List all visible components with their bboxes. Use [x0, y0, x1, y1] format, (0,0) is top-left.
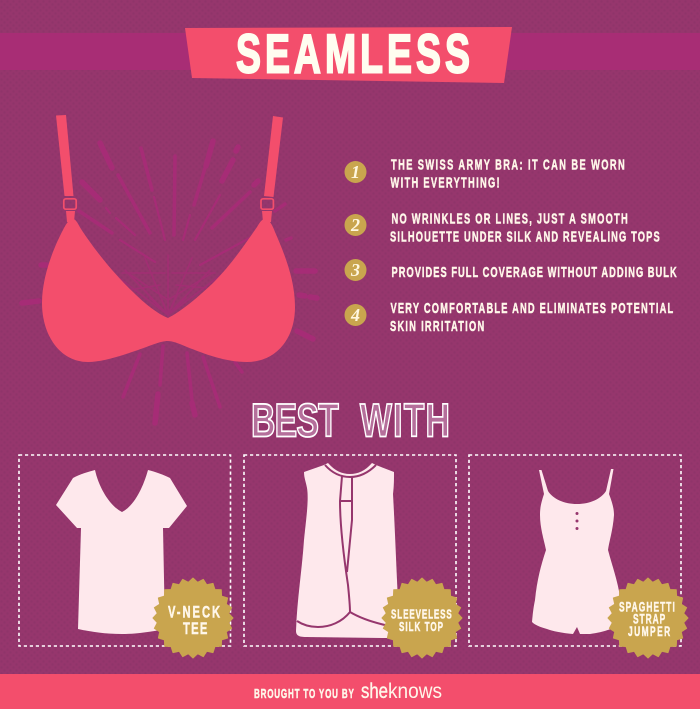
header ribbon band	[0, 33, 700, 70]
benefit 1	[344, 156, 625, 191]
badge: v-neck tee: TEE	[183, 620, 208, 639]
badge: sleeveless silk top	[382, 578, 462, 658]
footer	[0, 674, 700, 709]
benefit 4	[344, 300, 673, 335]
badge: v-neck tee	[153, 578, 233, 658]
footer credit: BROUGHT TO YOU BY	[254, 687, 354, 702]
burst rays behind bra	[22, 141, 317, 423]
icon: seamless bra	[42, 115, 295, 362]
heading: best with	[251, 394, 450, 447]
benefit 1: 1	[351, 162, 360, 182]
benefit 2: 2	[350, 215, 360, 235]
benefit 3: PROVIDES FULL COVERAGE WITHOUT ADDING BULK	[392, 264, 677, 281]
badge: spaghetti strap jumper: SPAGHETTI	[619, 601, 675, 615]
logo: sheknows: she	[361, 680, 388, 703]
title banner	[185, 22, 512, 84]
benefit 4: 4	[350, 305, 360, 325]
badge: spaghetti strap jumper	[608, 578, 688, 658]
title: SEAMLESS	[236, 22, 470, 84]
icon: v-neck tee	[56, 470, 187, 634]
badge: v-neck tee: V-NECK	[168, 603, 221, 622]
benefits list	[344, 156, 677, 335]
heading: best with: WITH	[360, 394, 450, 447]
logo: sheknows	[361, 680, 442, 703]
icon: spaghetti strap jumper	[532, 469, 622, 634]
logo: sheknows: knows	[388, 680, 442, 703]
panel: spaghetti strap jumper	[469, 455, 688, 658]
heading: best with: BEST	[251, 394, 339, 447]
badge: spaghetti strap jumper: JUMPER	[628, 625, 670, 640]
panel: v-neck tee	[19, 455, 233, 658]
benefit 4: VERY COMFORTABLE AND ELIMINATES POTENTIAL	[390, 300, 673, 317]
benefit 2: SILHOUETTE UNDER SILK AND REVEALING TOPS	[390, 228, 660, 245]
benefit 3: 3	[350, 260, 360, 280]
benefit 3	[344, 259, 677, 281]
panel: sleeveless silk top	[244, 455, 462, 658]
benefit 1: WITH EVERYTHING!	[390, 174, 500, 191]
badge: spaghetti strap jumper: STRAP	[633, 613, 666, 627]
benefit 4: SKIN IRRITATION	[390, 318, 484, 335]
badge: sleeveless silk top: SLEEVELESS	[391, 608, 452, 622]
icon: sleeveless silk top	[296, 463, 398, 638]
benefit 1: THE SWISS ARMY BRA: IT CAN BE WORN	[391, 156, 625, 173]
benefit 2: NO WRINKLES OR LINES, JUST A SMOOTH	[392, 210, 628, 227]
badge: sleeveless silk top: SILK TOP	[399, 620, 443, 635]
benefit 2	[344, 210, 660, 245]
